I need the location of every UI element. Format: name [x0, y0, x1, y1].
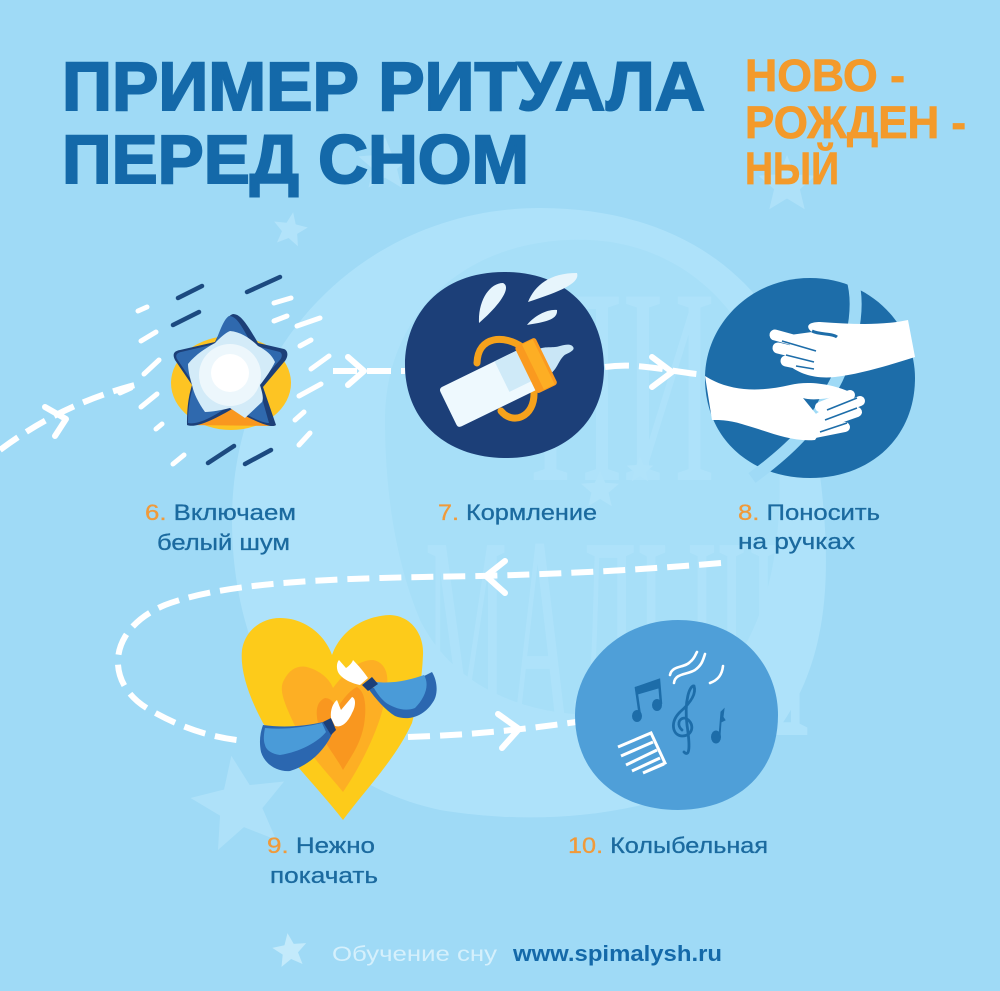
double note — [632, 680, 662, 722]
age tag: newborn — [745, 50, 966, 194]
milk drops — [479, 273, 577, 325]
step 10 label: 10. Колыбельная — [568, 833, 768, 858]
dashed route arrows — [0, 357, 721, 748]
baby hands — [331, 660, 368, 726]
age tag: newborn: РОЖДЕН - — [745, 97, 966, 148]
icon: heart with hugging arms — [242, 615, 437, 820]
step 7 label: 7. Кормление — [438, 500, 597, 525]
upper hand — [775, 320, 915, 377]
icon: star with white noise — [120, 277, 329, 464]
background watermark: moon emblem: ПИ — [530, 230, 715, 541]
icon: hands holding — [705, 278, 915, 478]
step 8 label — [738, 500, 880, 554]
lower hand — [705, 376, 860, 440]
step 8 label: 8. Поносить — [738, 500, 880, 525]
left arm — [260, 722, 333, 771]
title — [62, 48, 705, 198]
right arm — [367, 672, 437, 718]
age tag: newborn: НЫЙ — [745, 143, 839, 194]
footer: www.spimalysh.ru — [512, 941, 722, 966]
noise dashes, dark — [173, 277, 280, 464]
treble clef — [673, 686, 695, 753]
sound waves — [670, 652, 723, 683]
bottle body — [437, 324, 585, 432]
title: ПРИМЕР РИТУАЛА — [62, 48, 705, 125]
icon: lullaby music — [575, 620, 778, 810]
footer: Обучение сну — [332, 943, 498, 966]
footer — [271, 931, 722, 968]
step 6 label: 6. Включаем — [145, 500, 296, 525]
sheet music — [618, 733, 665, 773]
step 9 label — [267, 833, 378, 888]
step 6 label: белый шум — [157, 530, 290, 555]
step labels — [145, 500, 880, 888]
step 6 label — [145, 500, 296, 555]
step 9 label: покачать — [270, 863, 378, 888]
age tag: newborn: НОВО - — [745, 50, 905, 101]
background watermark: moon emblem — [185, 137, 826, 853]
step 9 label: 9. Нежно — [267, 833, 375, 858]
noise dashes, white — [120, 298, 329, 464]
title: ПЕРЕД СНОМ — [62, 121, 529, 198]
icon: baby bottle — [405, 272, 604, 458]
bottle handles — [477, 339, 534, 418]
step 8 label: на ручках — [738, 529, 855, 554]
single note — [711, 709, 725, 744]
